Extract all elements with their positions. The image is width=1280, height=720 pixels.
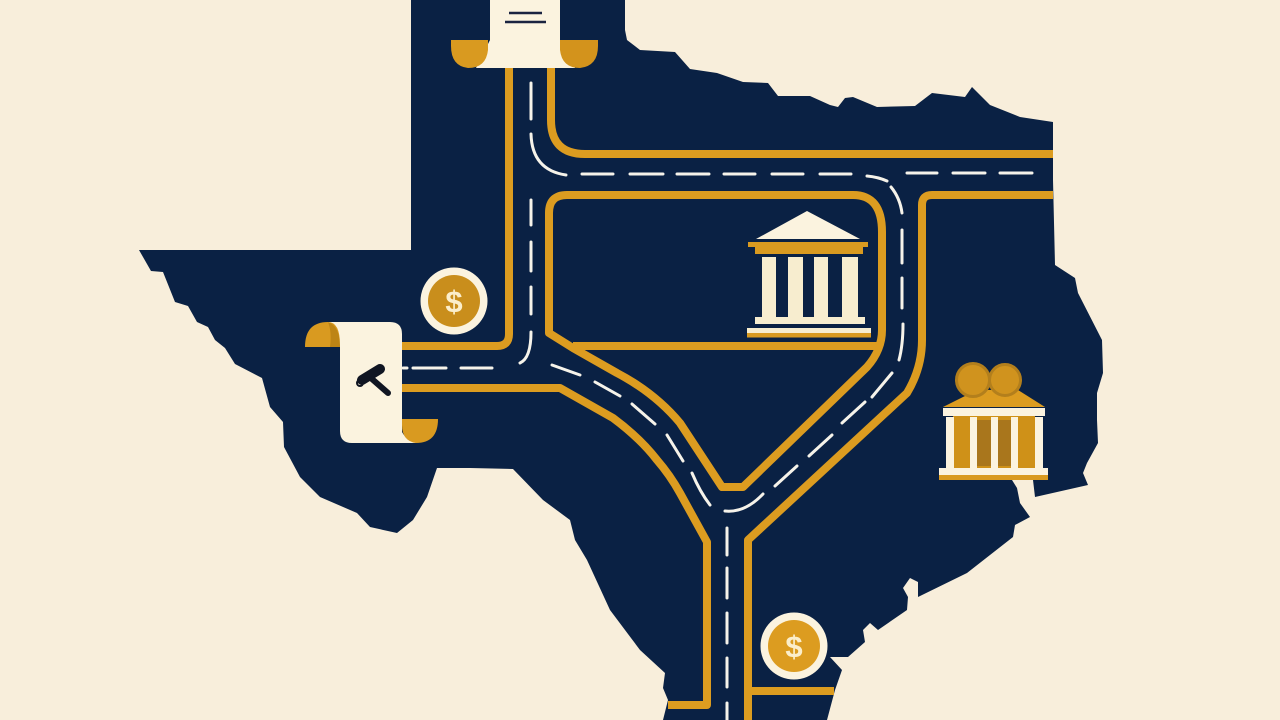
dollar sign: $ <box>445 284 463 319</box>
coin right <box>990 364 1020 396</box>
icon: top scroll <box>451 0 598 68</box>
roads: gold road edges <box>400 60 1053 720</box>
scroll right curl <box>402 419 438 443</box>
road edge: east to south <box>748 195 1053 720</box>
dashes: west horizontal <box>403 366 492 370</box>
dashes: north vertical <box>531 83 566 314</box>
column plinth <box>755 317 865 324</box>
roof <box>943 390 1045 407</box>
road edge: west to south <box>400 388 707 705</box>
coin face <box>428 275 480 327</box>
wall <box>953 416 1035 468</box>
scroll left curl <box>305 322 340 347</box>
map: Texas silhouette <box>139 0 1103 720</box>
dashes: junction curve <box>520 332 531 363</box>
cornice <box>748 242 868 254</box>
icon: dollar coin south <box>760 612 828 680</box>
scroll right curl <box>560 40 598 68</box>
dashes: upper horizontal <box>582 173 1032 213</box>
road edge: north to east upper <box>551 60 1053 154</box>
dashes: east curve <box>775 230 903 486</box>
road edge: north-west to west <box>400 60 509 346</box>
columns <box>946 417 1043 468</box>
dashes: south vertical <box>726 528 728 720</box>
scroll body <box>328 322 420 443</box>
road edge: south-east branch <box>750 687 834 695</box>
icon: coin-topped bank building <box>939 364 1048 480</box>
inner dark wall <box>977 420 1011 466</box>
scroll text lines <box>505 13 546 22</box>
base cream <box>939 468 1048 475</box>
coin rim <box>760 612 828 680</box>
black seal mark <box>357 369 388 393</box>
coin face <box>768 620 820 672</box>
base step cream <box>747 328 871 333</box>
columns <box>762 257 858 317</box>
dashes: diagonal branch <box>552 365 763 511</box>
icon: dollar coin north <box>420 268 488 334</box>
scroll curl shading <box>328 322 340 347</box>
scroll body <box>476 0 575 68</box>
icon: central bank building <box>747 211 871 338</box>
coin rim <box>420 268 488 334</box>
coin left <box>956 364 990 396</box>
entablature <box>943 408 1045 416</box>
icon: west scroll <box>305 322 438 443</box>
dollar sign: $ <box>785 629 803 664</box>
roof pediment <box>756 211 860 239</box>
base step gold <box>747 333 871 338</box>
base gold <box>939 475 1048 480</box>
road edge: central crossbar <box>573 342 880 350</box>
scroll left curl <box>451 40 488 68</box>
roads: white dashed centre lines <box>403 83 1032 720</box>
road edge: central loop <box>549 195 882 487</box>
